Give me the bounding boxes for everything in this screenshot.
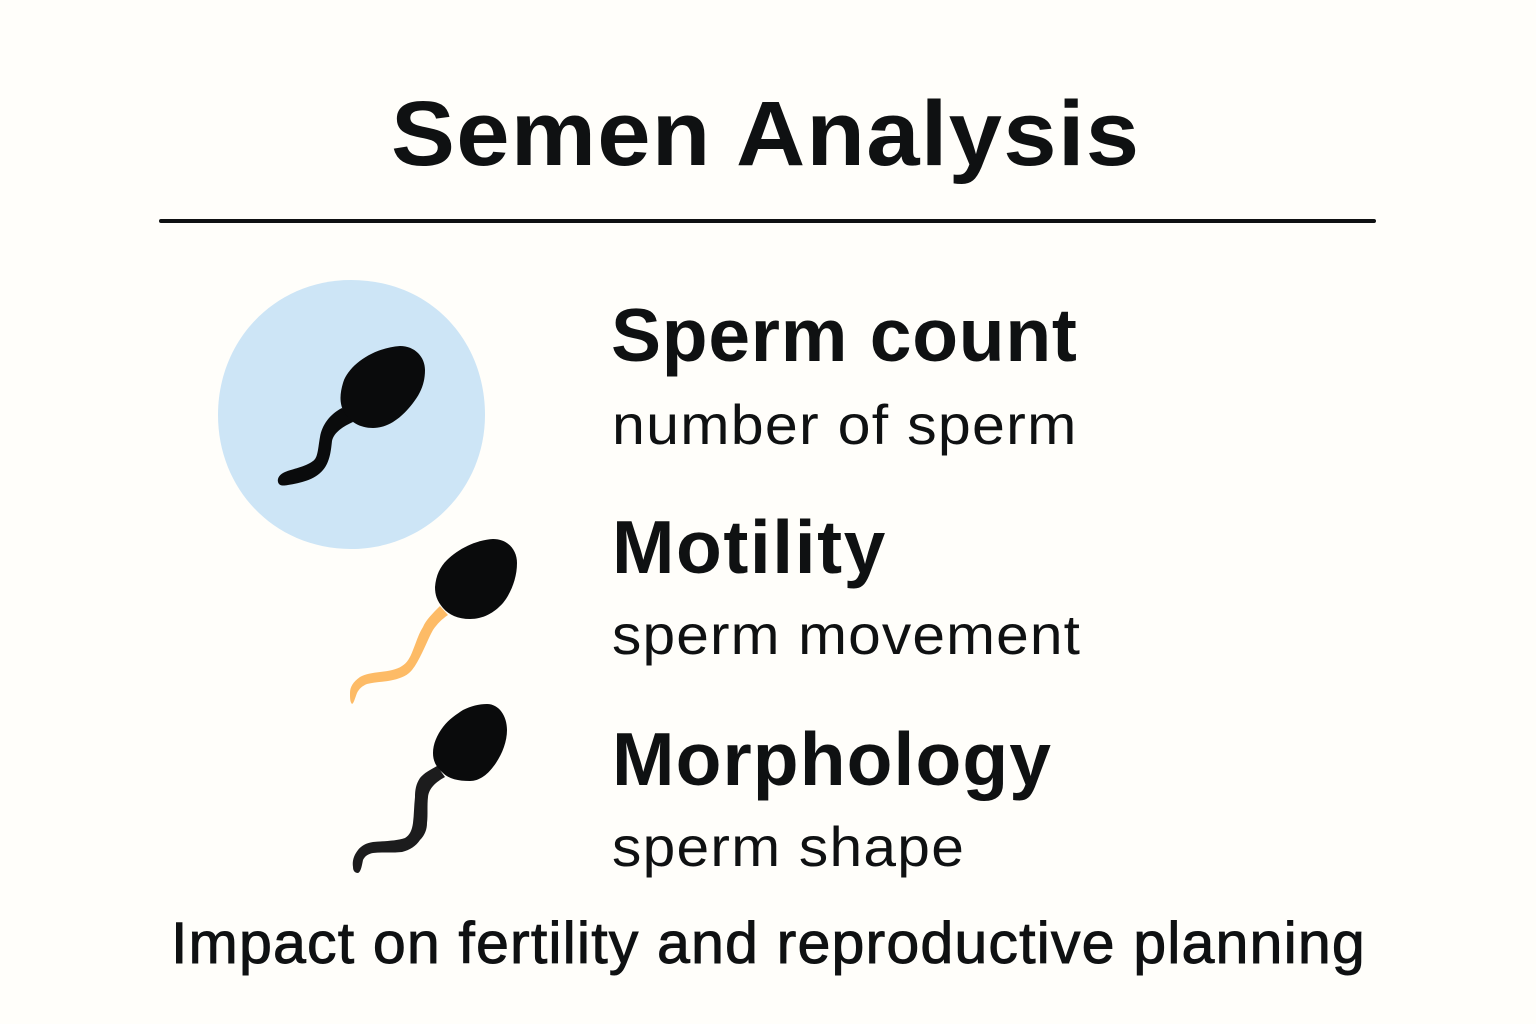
blue circle <box>218 280 485 549</box>
heading: morphology: Morphology <box>612 717 1052 801</box>
sperm tail <box>278 408 353 486</box>
text: sperm shape: sperm shape <box>612 815 965 878</box>
sperm head <box>435 539 517 619</box>
heading: sperm count: Sperm count <box>611 293 1078 377</box>
icon: sperm with black tail <box>353 704 507 873</box>
sperm head <box>340 346 425 428</box>
icon: sperm in blue circle <box>218 280 485 549</box>
title divider <box>159 219 1376 223</box>
footer caption: Impact on fertility and reproductive planning <box>171 911 1366 976</box>
text: sperm movement: sperm movement <box>612 603 1081 666</box>
orange tail <box>350 606 448 704</box>
sperm tail <box>353 766 445 873</box>
icon: sperm with orange tail <box>350 539 517 704</box>
heading: motility: Motility <box>612 505 887 589</box>
text: number of sperm: number of sperm <box>612 393 1078 456</box>
title: Semen Analysis <box>391 83 1140 185</box>
sperm head <box>433 704 507 781</box>
